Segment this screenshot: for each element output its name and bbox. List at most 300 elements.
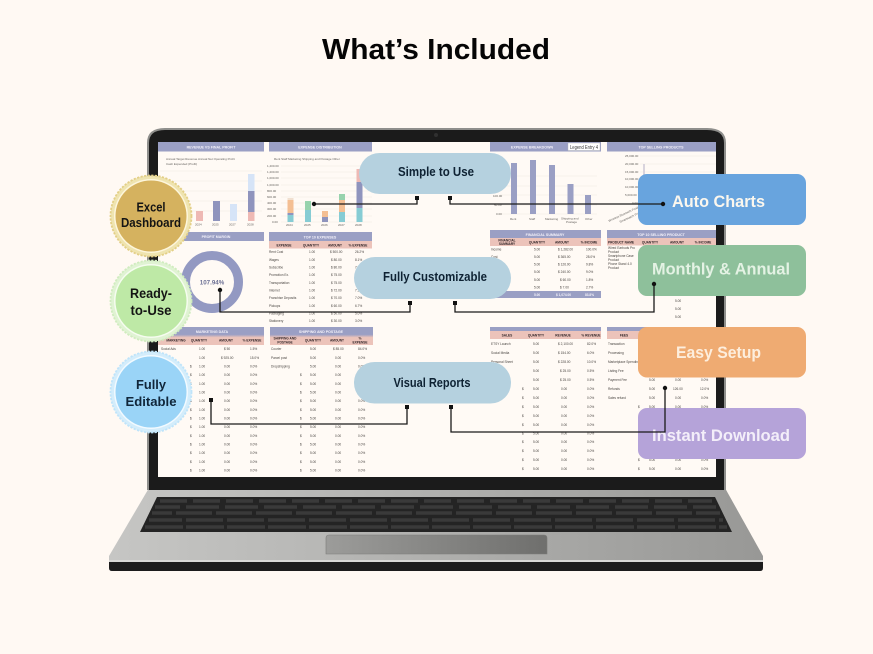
connector: marketing table to visual reports (209, 398, 409, 424)
box: auto charts: Auto Charts (672, 193, 765, 211)
table: shipping and postage: 5.00 (310, 399, 316, 403)
table: top 10 expenses: 5.0% (355, 312, 362, 316)
table: shipping and postage: 0.0% (358, 460, 365, 464)
table: sales: 0.0% (587, 449, 594, 453)
table: shipping and postage: 84.0% (358, 347, 367, 351)
panel: expense breakdown chart: 100.00 (493, 194, 503, 198)
table: sales: 5.00 (533, 414, 539, 418)
table: marketing data: 0.00 (224, 468, 230, 472)
table: shipping and postage: POSTAGE (277, 340, 293, 344)
table: shipping and postage: 5.00 (310, 434, 316, 438)
table: fees: Refunds (608, 387, 620, 391)
panel: top selling products chart: 15,000.00 (625, 170, 639, 174)
panel: top selling products chart: 10,000.00 (625, 177, 639, 181)
pill: simple to use: Simple to Use (398, 165, 474, 179)
table: marketing data: QUANTITY (191, 338, 208, 342)
table: marketing data: 1.00 (199, 382, 205, 386)
table: marketing data: 15.0% (250, 356, 259, 360)
table: shipping and postage: Courier (271, 347, 282, 351)
table: shipping and postage: 0.0% (358, 451, 365, 455)
table: financial summary: 5.00 (534, 270, 540, 274)
table: sales: 5.00 (533, 378, 539, 382)
panel: top selling products chart: Smartwatch Pro (619, 211, 640, 224)
table: shipping and postage: 0.0% (358, 382, 365, 386)
table: sales: 5.00 (533, 432, 539, 436)
table: marketing data: 1.00 (199, 460, 205, 464)
pill: visual reports (354, 362, 511, 404)
table: sales: 0.00 (561, 387, 567, 391)
badge: ready-to-use: Ready- (130, 286, 172, 301)
table: financial summary: 100.0% (586, 248, 597, 252)
box: instant download (638, 408, 806, 459)
table: sales: 0.0% (587, 414, 594, 418)
table: shipping and postage: EXPENSE (352, 340, 368, 344)
panel: profit margin donut (158, 232, 264, 308)
table: marketing data: 0.0% (250, 408, 257, 412)
table: marketing data: Social Ads (161, 347, 176, 351)
table: shipping and postage: 0.00 (335, 399, 341, 403)
table: financial summary: 28.0% (586, 255, 595, 259)
table: marketing data: $ (190, 364, 192, 368)
table: financial summary: 5.00 (534, 262, 540, 266)
table: top 10 expenses: 1.00 (309, 312, 315, 316)
table: financial summary: QUANTITY (529, 240, 546, 244)
table: shipping and postage: 0.00 (335, 408, 341, 412)
table: fees: FEES (620, 334, 628, 338)
table: top 10 expenses (269, 232, 372, 323)
table: fees: $ (638, 467, 640, 471)
table: marketing data: 0.00 (224, 451, 230, 455)
table: top selling product: AMOUNT (670, 240, 684, 244)
table: financial summary: SUMMARY (499, 242, 516, 246)
table: sales: $ (522, 432, 524, 436)
table: shipping and postage: $ (300, 425, 302, 429)
panel: expense distribution chart: 2026 (321, 223, 328, 227)
panel: expense breakdown chart: 0.00 (496, 212, 502, 216)
table: sales: ETSY Launch (491, 342, 511, 346)
table: sales: SALES (502, 334, 512, 338)
table: shipping and postage: SHIPPING AND (274, 336, 297, 340)
panel: expense distribution chart: 1,000.00 (267, 176, 279, 180)
table: financial summary: Cost (491, 255, 498, 259)
table: sales: 5.00 (533, 449, 539, 453)
table: marketing data: 1.00 (199, 364, 205, 368)
table: marketing data: 0.0% (250, 390, 257, 394)
table: shipping and postage: QUANTITY (305, 338, 322, 342)
table: financial summary: $ 365.00 (558, 255, 571, 259)
panel: expense distribution chart: 400.00 (267, 201, 277, 205)
box: monthly and annual: Monthly & Annual (652, 260, 790, 278)
panel: revenue chart: Annual Target Revenue Annual Net Operating Profit (166, 157, 235, 161)
panel: revenue chart: REVENUE VS FINAL PROFIT (187, 146, 236, 150)
table: shipping and postage: SHIPPING AND POSTAGE (299, 330, 344, 334)
panel: expense distribution chart: Rent Staff Marketing Shipping and Postage Other (274, 157, 340, 161)
table: marketing data: 1.00 (199, 390, 205, 394)
table: shipping and postage: 0.00 (335, 460, 341, 464)
table: fees: $ (638, 458, 640, 462)
table: marketing data: 1.00 (199, 442, 205, 446)
table: shipping and postage: 5.00 (310, 425, 316, 429)
table: top 10 expenses: 8.1% (355, 258, 362, 262)
table: shipping and postage: $ (300, 451, 302, 455)
table: sales: 5.00 (533, 342, 539, 346)
table: financial summary: FINANCIAL (498, 238, 516, 242)
table: sales: 0.0% (587, 432, 594, 436)
table: financial summary: $ 60.00 (560, 278, 571, 282)
table: marketing data: 0.0% (250, 364, 257, 368)
table: top 10 expenses: 1.00 (309, 319, 315, 323)
table: top selling product: 5.00 (675, 307, 681, 311)
panel: top selling products chart: 25,000.00 (625, 154, 639, 158)
table: sales: 5.00 (533, 405, 539, 409)
table: fees: 0.0% (701, 467, 708, 471)
table: financial summary: $ 7.00 (560, 286, 569, 290)
table: shipping and postage: $ (300, 442, 302, 446)
table: fees: Marketplace Spending (608, 360, 640, 364)
panel: expense distribution chart: 2024 (286, 223, 293, 227)
table: marketing data: 0.0% (250, 382, 257, 386)
table: shipping and postage: $ (300, 390, 302, 394)
pill: fully customizable (354, 257, 511, 299)
table: fees: 12.0% (700, 387, 709, 391)
table: fees: 0.00 (675, 378, 681, 382)
table: top selling product: Product (608, 250, 619, 254)
table: shipping and postage: 5.00 (310, 416, 316, 420)
table: marketing data: $ (190, 451, 192, 455)
table: shipping and postage: Parcel post (271, 356, 287, 360)
table: fees: 0.0% (701, 458, 708, 462)
table: sales: $ (522, 458, 524, 462)
badge: excel dashboard: Excel (136, 200, 166, 214)
table: sales: Social Media (491, 351, 509, 355)
connector: fully customizable to monthly and annual (453, 282, 656, 312)
panel: top selling products chart: 10,000.00 (625, 185, 639, 189)
table: shipping and postage: 0.00 (335, 390, 341, 394)
table: fees: 0.0% (701, 378, 708, 382)
table: top selling product: Phone Stand 4.0 (608, 262, 632, 266)
table: marketing data: 0.00 (224, 416, 230, 420)
table: marketing data: 0.00 (224, 373, 230, 377)
trackpad (326, 535, 547, 554)
table: top 10 expenses: 7.1% (355, 281, 362, 285)
badge: ready-to-use (110, 260, 192, 342)
table: fees: 0.00 (675, 458, 681, 462)
table: top 10 expenses: 1.00 (309, 296, 315, 300)
table: top selling product: Product (608, 258, 619, 262)
connector: simple to use to auto charts (448, 196, 665, 206)
table: top selling product: Product (608, 266, 619, 270)
table: marketing data: $ 925.00 (221, 356, 234, 360)
panel: expense breakdown chart: Staff (529, 217, 535, 221)
table: shipping and postage: 0.0% (358, 408, 365, 412)
table: fees: 0.00 (675, 396, 681, 400)
table: fees: Payment Fee (608, 378, 627, 382)
table: top 10 expenses: $ 50.00 (331, 312, 342, 316)
table: marketing data: $ 50 (224, 347, 230, 351)
table: shipping and postage: 5.00 (310, 373, 316, 377)
table: marketing data: 1.5% (250, 347, 257, 351)
table: marketing data: 0.0% (250, 416, 257, 420)
table: financial summary: 2.7% (586, 286, 593, 290)
panel: expense distribution chart: 600.00 (267, 195, 277, 199)
table: marketing data (158, 327, 264, 472)
table: sales: 5.00 (533, 423, 539, 427)
table: top 10 expenses: 6.7% (355, 304, 362, 308)
table: top 10 expenses: $ 60.00 (331, 304, 342, 308)
table: marketing data: MARKETING (166, 338, 186, 342)
table: top selling product: PRODUCT NAME (608, 240, 634, 244)
table: marketing data: $ (190, 434, 192, 438)
table: top 10 expenses: 1.00 (309, 266, 315, 270)
table: marketing data: 0.0% (250, 460, 257, 464)
panel: expense distribution chart: 2028 (355, 223, 362, 227)
panel: expense breakdown chart: 50.00 (494, 203, 502, 207)
table: top 10 expenses: 3.0% (355, 319, 362, 323)
table: top 10 expenses: 1.00 (309, 258, 315, 262)
webcam (434, 133, 438, 137)
screen (158, 142, 716, 477)
table: marketing data: 0.00 (224, 460, 230, 464)
table: top 10 expenses: QUANTITY (303, 244, 320, 248)
table: shipping and postage: $ (300, 399, 302, 403)
laptop (109, 128, 763, 571)
table: sales: $ (522, 396, 524, 400)
table: fees: 0.00 (675, 467, 681, 471)
pill: visual reports: Visual Reports (394, 376, 471, 390)
table: top 10 expenses: $ 80.00 (331, 258, 342, 262)
table: top selling product (607, 230, 716, 319)
box: easy setup (638, 327, 806, 378)
panel: revenue chart: 2025 (212, 222, 219, 226)
table: shipping and postage: % (359, 336, 362, 340)
table: marketing data: 0.0% (250, 442, 257, 446)
table: sales: 0.5% (587, 369, 594, 373)
table: sales: 0.00 (561, 414, 567, 418)
table: marketing data: 1.00 (199, 373, 205, 377)
table: fees: Listing Fee (608, 369, 624, 373)
panel: revenue chart: Cash Expended (Profit) (166, 162, 197, 166)
table: shipping and postage: 0.0% (358, 442, 365, 446)
table: top 10 expenses: 1.00 (309, 304, 315, 308)
table: sales: 0.0% (587, 405, 594, 409)
table: top 10 expenses: 7.0% (355, 296, 362, 300)
table: top 10 expenses: $ 30.00 (331, 319, 342, 323)
table: financial summary: 5.00 (534, 248, 540, 252)
table: sales: 0.00 (561, 396, 567, 400)
table: top 10 expenses: Internet (269, 288, 280, 292)
panel: profit margin donut: 107.94% (200, 280, 225, 286)
panel: expense distribution chart: 0.00 (272, 220, 278, 224)
panel: expense distribution chart: 1,000.00 (267, 183, 279, 187)
table: shipping and postage: 5.00 (310, 408, 316, 412)
table: top 10 expenses: Subscribe (269, 266, 283, 270)
table: shipping and postage: 0.00 (335, 451, 341, 455)
table: financial summary: 1.8% (586, 278, 593, 282)
panel: expense distribution chart: 800.00 (267, 189, 277, 193)
table: financial summary: FINANCIAL SUMMARY (526, 233, 565, 237)
keyboard (140, 497, 732, 532)
table: marketing data: $ (190, 399, 192, 403)
panel: expense breakdown chart: Marketing (545, 217, 559, 221)
table: financial summary: 83.8% (585, 293, 594, 297)
table: sales: 0.00 (561, 405, 567, 409)
panel: expense breakdown chart (490, 142, 601, 224)
table: shipping and postage: 5.00 (310, 356, 316, 360)
table: sales: 5.00 (533, 387, 539, 391)
table: shipping and postage: $ (300, 373, 302, 377)
table: shipping and postage (270, 327, 373, 472)
table: sales: $ (522, 414, 524, 418)
laptop lid (147, 128, 726, 490)
table: marketing data: $ (190, 442, 192, 446)
table: sales: 0.5% (587, 378, 594, 382)
table: sales: 0.0% (587, 387, 594, 391)
table: sales: 0.00 (561, 449, 567, 453)
table: top 10 expenses: 1.00 (309, 273, 315, 277)
table: top 10 expenses: Stationery (269, 319, 284, 323)
table: marketing data: 0.0% (250, 434, 257, 438)
table: shipping and postage: 0.0% (358, 434, 365, 438)
pill: simple to use (359, 153, 511, 194)
badge: fully editable: Editable (126, 395, 177, 409)
table: shipping and postage: 5.00 (310, 451, 316, 455)
panel: expense distribution chart: 2025 (304, 223, 311, 227)
table: sales: 0.0% (587, 423, 594, 427)
panel: expense distribution chart: 200.00 (267, 214, 277, 218)
panel: expense breakdown chart: Postage (566, 220, 577, 224)
table: fees: Sales refund (608, 396, 626, 400)
table: fees: 5.00 (649, 458, 655, 462)
table: sales: 5.00 (533, 360, 539, 364)
table: financial summary: 5.00 (534, 278, 540, 282)
panel: top selling products chart (607, 142, 716, 224)
panel: revenue chart (158, 142, 264, 226)
connector: visual reports to fees table (449, 386, 667, 432)
table: shipping and postage: 5.00 (310, 442, 316, 446)
table: marketing data: 0.00 (224, 442, 230, 446)
table: financial summary: $ 1,074.00 (556, 293, 571, 297)
table: fees: 5.00 (649, 467, 655, 471)
box: auto charts (638, 174, 806, 225)
table: top selling product: TOP 10 SELLING PRODUCT (637, 233, 686, 237)
table: marketing data: $ (190, 416, 192, 420)
table: top 10 expenses: 26.2% (355, 250, 364, 254)
table: sales: 0.0% (587, 396, 594, 400)
table: marketing data: $ (190, 468, 192, 472)
table: sales: % REVENUE (581, 334, 601, 338)
laptop base (109, 488, 763, 571)
table: sales: 0.0% (587, 467, 594, 471)
table: shipping and postage: 0.00 (335, 373, 341, 377)
box: instant download: Instant Download (652, 427, 790, 445)
table: sales: 5.00 (533, 467, 539, 471)
table: fees: 5.00 (649, 378, 655, 382)
table: sales: $ (522, 423, 524, 427)
panel: expense breakdown chart: Other (585, 217, 593, 221)
panel: top selling products chart: Wireless Bluetooth Product (608, 204, 642, 223)
table: marketing data: 1.00 (199, 356, 205, 360)
table: sales: $ (522, 449, 524, 453)
table: top 10 expenses: Transportation (269, 281, 290, 285)
panel: expense distribution chart: 300.00 (267, 207, 277, 211)
table: marketing data: MARKETING DATA (196, 330, 229, 334)
connector: revenue chart to simple to use (312, 196, 419, 206)
table: shipping and postage: 5.00 (310, 364, 316, 368)
table: shipping and postage: 0.0% (358, 364, 365, 368)
table: top 10 expenses: $ 80.00 (331, 266, 342, 270)
table: marketing data: 0.00 (224, 408, 230, 412)
table: financial summary: $ 1,282.00 (558, 248, 573, 252)
panel: profit margin donut: PROFIT MARGIN (202, 235, 231, 239)
table: fees: 5.00 (649, 396, 655, 400)
table: financial summary: 5.00 (534, 255, 540, 259)
table: shipping and postage: 5.00 (310, 460, 316, 464)
panel: expense breakdown chart: Rent (510, 217, 517, 221)
table: shipping and postage: $ (300, 408, 302, 412)
table: shipping and postage: $ 85.00 (333, 347, 344, 351)
table: marketing data: 0.00 (224, 390, 230, 394)
table: sales: $ 25.00 (560, 378, 571, 382)
panel: revenue chart: 2024 (195, 222, 202, 226)
table: top 10 expenses: 7.1% (355, 273, 362, 277)
table: top selling product: % INCOME (695, 240, 711, 244)
panel: revenue chart: 2027 (229, 222, 236, 226)
pill: fully customizable: Fully Customizable (383, 270, 487, 284)
table: top 10 expenses: $ 75.00 (331, 281, 342, 285)
table: sales: 0.00 (561, 423, 567, 427)
table: marketing data: $ (190, 373, 192, 377)
table: marketing data: 1.00 (199, 399, 205, 403)
table: marketing data: 0.00 (224, 364, 230, 368)
table: top 10 expenses: Packaging (269, 312, 284, 316)
table: top 10 expenses: Rent Cost (269, 250, 283, 254)
table: financial summary: 5.00 (534, 293, 540, 297)
table: marketing data: 1.00 (199, 408, 205, 412)
table: top 10 expenses: 1.00 (309, 288, 315, 292)
table: shipping and postage: 0.0% (358, 468, 365, 472)
table: top selling product: Wired Earbuds Pro (608, 246, 635, 250)
table: financial summary: 9.8% (586, 262, 593, 266)
table: top selling product: 5.00 (675, 315, 681, 319)
table: marketing data: 1.00 (199, 425, 205, 429)
table: marketing data: 1.00 (199, 416, 205, 420)
panel: expense distribution chart: EXPENSE DISTRIBUTION (298, 146, 342, 150)
badge: excel dashboard: Dashboard (121, 216, 181, 230)
panel: top selling products chart: 20,000.00 (625, 162, 639, 166)
table: shipping and postage: 0.00 (335, 434, 341, 438)
table: shipping and postage: 0.00 (335, 425, 341, 429)
table: shipping and postage: 0.0% (358, 373, 365, 377)
table: marketing data: 1.00 (199, 468, 205, 472)
table: fees: Processing (608, 351, 624, 355)
table: shipping and postage: 0.00 (335, 416, 341, 420)
panel: top selling products chart: TOP SELLING PRODUCTS (638, 146, 684, 150)
table: sales: 5.00 (533, 396, 539, 400)
table: top selling product: Smartphone Case (608, 254, 634, 258)
table: sales: QUANTITY (528, 334, 545, 338)
table: top 10 expenses: AMOUNT (328, 244, 342, 248)
panel: revenue chart: 2028 (247, 222, 254, 226)
table: marketing data: % EXPENSE (243, 338, 261, 342)
table: sales (490, 327, 601, 471)
table: fees: 126.00 (673, 387, 683, 391)
table: shipping and postage: 5.00 (310, 382, 316, 386)
table: marketing data: 0.00 (224, 434, 230, 438)
table: shipping and postage: 0.0% (358, 390, 365, 394)
table: marketing data: 1.00 (199, 347, 205, 351)
table: marketing data: $ (190, 425, 192, 429)
table: sales: $ 2,100.00 (558, 342, 573, 346)
